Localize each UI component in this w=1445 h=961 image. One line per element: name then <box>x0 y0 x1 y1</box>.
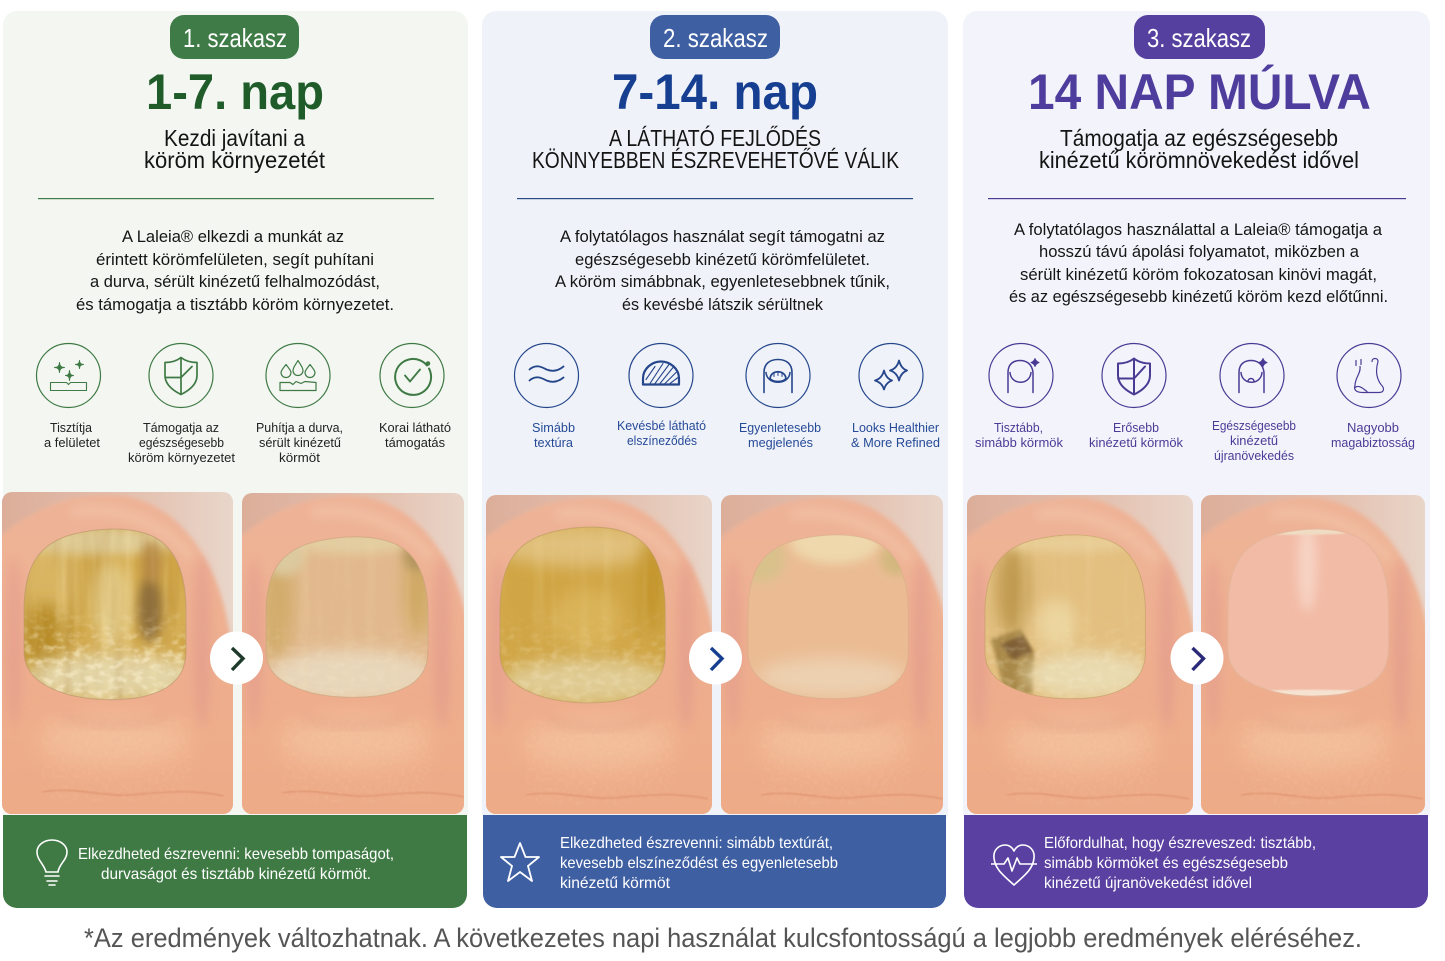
panel: stage 1 <box>0 11 488 908</box>
body text 3: A folytatólagos használattal a Laleia® támogatja a <box>1014 220 1383 239</box>
icon labels 1: Tisztítja <box>50 420 93 435</box>
body text 2: és kevésbé látszik sérültnek <box>622 295 823 314</box>
body text 1: érintett körömfelületen, segít puhítani <box>96 250 374 269</box>
icon labels 2: Simább <box>532 420 575 435</box>
body text 1: A Laleia® elkezdi a munkát az <box>122 227 344 246</box>
arrow: stage 1 <box>210 632 263 684</box>
icon: heart with pulse <box>991 845 1037 885</box>
subheading 2 <box>532 125 900 173</box>
icon: shield <box>149 344 213 408</box>
arrow: stage 3 <box>1170 632 1224 684</box>
icon: regrowing nail <box>1220 344 1284 408</box>
stage badge 2: 2. szakasz <box>663 23 768 53</box>
icon: waves <box>514 344 578 408</box>
icon labels 3: kinézetű <box>1230 433 1278 448</box>
arrow: stage 2 <box>689 632 742 684</box>
icon: foot <box>1337 344 1401 408</box>
callout text 3 <box>1044 835 1316 892</box>
callout text 1: durvaságot és tisztább kinézetű körmöt. <box>101 866 371 883</box>
callout text 2: Elkezdheted észrevenni: simább textúrát, <box>560 835 833 852</box>
icon labels 3: magabiztosság <box>1331 435 1415 450</box>
body text 2: egészségesebb kinézetű körömfelületet. <box>575 250 870 269</box>
icon labels 3: újranövekedés <box>1214 448 1294 463</box>
icon: light bulb <box>37 840 67 885</box>
icon labels 3 <box>975 418 1415 463</box>
body text 3: hosszú távú ápolási folyamatot, miközben a <box>1039 242 1360 261</box>
footnote: *Az eredmények változhatnak. A következetes napi használat kulcsfontosságú a legjobb eredmények eléréséhez. <box>84 923 1362 953</box>
photo: stage 1 after <box>242 493 464 814</box>
stage badge 3: 3. szakasz <box>1147 23 1251 53</box>
panel: stage 3 <box>945 11 1445 908</box>
icon: clean nail <box>989 344 1053 408</box>
photo: stage 2 before <box>486 495 712 814</box>
subheading 2: KÖNNYEBBEN ÉSZREVEHETŐVÉ VÁLIK <box>532 147 900 173</box>
body text 1: a durva, sérült kinézetű felhalmozódást, <box>90 272 380 291</box>
icon labels 2: megjelenés <box>748 435 813 450</box>
icon labels 2: & More Refined <box>851 435 940 450</box>
icon labels 1: támogatás <box>385 435 445 450</box>
subheading 1: Kezdi javítani a <box>164 125 305 151</box>
callout bar 2 <box>483 815 946 908</box>
callout text 3: Előfordulhat, hogy észreveszed: tisztább, <box>1044 835 1316 852</box>
icon labels 2: Looks Healthier <box>852 420 940 435</box>
photo: stage 1 before <box>2 492 233 814</box>
callout text 1 <box>78 846 394 883</box>
subheading 1: köröm környezetét <box>144 147 326 173</box>
callout text 2: kevesebb elszíneződést és egyenletesebb <box>560 855 838 872</box>
callout text 3: simább körmöket és egészségesebb <box>1044 855 1288 872</box>
callout text 2 <box>560 835 838 892</box>
icon labels 1 <box>44 420 451 465</box>
icon: strong shield <box>1102 344 1166 408</box>
icon labels 2: Egyenletesebb <box>739 420 821 435</box>
icon: check <box>380 344 444 408</box>
body text 3: és az egészségesebb kinézetű köröm kezd előtűnni. <box>1009 287 1388 306</box>
callout text 1: Elkezdheted észrevenni: kevesebb tompaságot, <box>78 846 394 863</box>
icon: sparkles over surface <box>36 344 100 408</box>
icon labels 3: Egészségesebb <box>1212 418 1296 433</box>
stage badge 3 <box>1134 15 1265 59</box>
subheading 3 <box>1039 125 1359 173</box>
icon labels 3: Tisztább, <box>994 420 1043 435</box>
subheading 2: A LÁTHATÓ FEJLŐDÉS <box>609 125 821 151</box>
heading: 1-7. nap: 1-7. nap <box>146 64 324 120</box>
subheading 3: kinézetű körömnövekedést idővel <box>1039 147 1359 173</box>
photo: stage 3 after <box>1201 495 1425 814</box>
icon labels 3: kinézetű körmök <box>1089 435 1183 450</box>
icon labels 1: köröm környezetet <box>128 450 235 465</box>
photo: stage 2 after <box>721 495 943 814</box>
icon: two sparkles <box>859 344 923 408</box>
body text 3: sérült kinézetű köröm fokozatosan kinövi magát, <box>1020 265 1377 284</box>
photo: stage 3 before <box>967 495 1193 814</box>
body text 2: A köröm simábbnak, egyenletesebbnek tűnik, <box>555 272 890 291</box>
icon labels 2: textúra <box>534 435 574 450</box>
icon labels 1: Puhítja a durva, <box>256 420 343 435</box>
callout bar 3 <box>964 815 1428 908</box>
body text 1: és támogatja a tisztább köröm környezetet. <box>76 295 394 314</box>
stage badge 1 <box>170 15 299 59</box>
icon labels 2: elszíneződés <box>627 433 697 448</box>
icon labels 1: körmöt <box>279 450 320 465</box>
heading: 7-14. nap: 7-14. nap <box>612 64 818 120</box>
icon: star <box>501 843 539 881</box>
icon labels 2 <box>532 418 940 450</box>
icon labels 1: a felületet <box>44 435 100 450</box>
subheading 1 <box>144 125 326 173</box>
panel: stage 2 <box>464 11 967 908</box>
icon labels 1: Támogatja az <box>143 420 219 435</box>
body text 2: A folytatólagos használat segít támogatni az <box>560 227 885 246</box>
subheading 3: Támogatja az egészségesebb <box>1060 125 1338 151</box>
body text 3 <box>1009 220 1388 306</box>
icon: hatched nail <box>629 344 693 408</box>
callout text 2: kinézetű körmöt <box>560 875 671 892</box>
callout bar 1 <box>3 815 467 908</box>
icon labels 1: egészségesebb <box>139 435 224 450</box>
icon labels 3: Nagyobb <box>1347 420 1399 435</box>
icon labels 1: sérült kinézetű <box>259 435 341 450</box>
heading: 14 NAP MÚLVA: 14 NAP MÚLVA <box>1028 64 1371 120</box>
stage badge 2 <box>650 15 780 59</box>
icon: finger nail <box>746 344 810 408</box>
stage badge 1: 1. szakasz <box>183 23 287 53</box>
icon labels 3: Erősebb <box>1113 420 1159 435</box>
callout text 3: kinézetű újranövekedést idővel <box>1044 875 1252 892</box>
body text 1 <box>76 227 394 314</box>
icon labels 2: Kevésbé látható <box>617 418 706 433</box>
body text 2 <box>555 227 890 314</box>
icon labels 3: simább körmök <box>975 435 1063 450</box>
icon labels 1: Korai látható <box>379 420 451 435</box>
icon: drops on rough surface <box>266 344 330 408</box>
